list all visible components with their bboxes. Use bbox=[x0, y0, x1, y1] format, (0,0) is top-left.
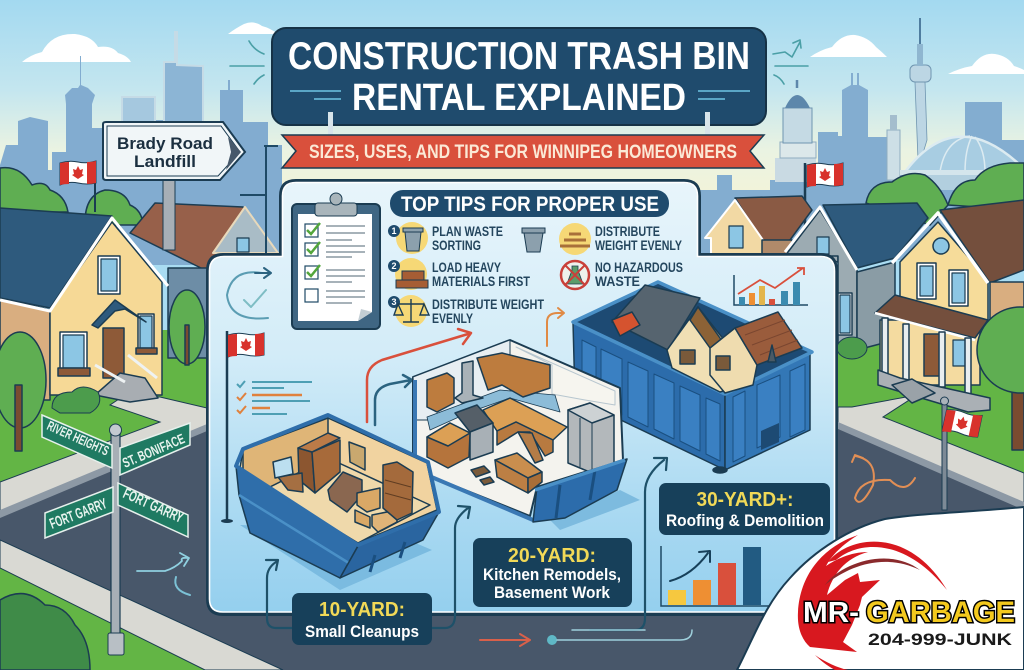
bush bottom left bbox=[0, 594, 90, 670]
title board bbox=[272, 28, 766, 136]
title board: RENTAL EXPLAINED bbox=[352, 77, 686, 119]
ribbon subtitle: SIZES, USES, AND TIPS FOR WINNIPEG HOMEOWNERS bbox=[309, 142, 737, 163]
logo lower swoosh bbox=[815, 655, 848, 670]
house: yellow right bbox=[875, 200, 1024, 412]
armchair bbox=[328, 472, 362, 512]
sidewalk left upper bbox=[0, 395, 207, 517]
picture bbox=[349, 442, 365, 470]
left face panels bbox=[582, 340, 720, 461]
range hood bbox=[455, 361, 483, 403]
right tree bbox=[977, 307, 1024, 450]
debris bbox=[471, 466, 494, 485]
interior walls bbox=[240, 418, 437, 543]
tip 1: plan waste sorting: PLAN WASTE bbox=[432, 224, 503, 239]
tip 3: distribute weight evenly: EVENLY bbox=[432, 311, 473, 326]
blue rim and body bbox=[415, 380, 533, 520]
house: gray right bbox=[785, 203, 928, 350]
left base cabinet bbox=[427, 423, 470, 468]
tip 1: plan waste sorting bbox=[388, 222, 503, 254]
arrow: orange bbox=[547, 308, 564, 346]
right face bbox=[725, 352, 810, 470]
10-yard label: Small Cleanups bbox=[305, 622, 419, 641]
arrow to 10-yard bbox=[266, 560, 293, 628]
kitchen walls bbox=[413, 340, 623, 516]
title board: CONSTRUCTION TRASH BIN bbox=[288, 35, 750, 78]
upper cabinets bbox=[477, 353, 550, 397]
street sign: river heights: RIVER HEIGHTS bbox=[45, 418, 111, 459]
background trees bbox=[0, 163, 1024, 225]
tip: distribute weight evenly right bbox=[559, 223, 682, 255]
skyline right bbox=[700, 18, 1024, 260]
30-yard label: 30-YARD+: bbox=[696, 489, 794, 511]
main panel bbox=[208, 181, 836, 614]
tip: distribute weight evenly right: DISTRIBUTE bbox=[595, 224, 660, 239]
front left tree bbox=[0, 332, 46, 451]
rim bbox=[236, 415, 439, 545]
logo red maple crescent bbox=[798, 535, 880, 652]
logo wordmark: MR- bbox=[803, 597, 859, 629]
title side accents bbox=[230, 40, 808, 84]
small tree bbox=[169, 290, 205, 365]
sky background bbox=[0, 0, 1024, 200]
brown roof bbox=[735, 312, 802, 365]
curb right bbox=[838, 422, 1024, 510]
street sign: fort garry right bbox=[118, 483, 188, 537]
tip: distribute weight evenly right: WEIGHT EVENLY bbox=[595, 238, 682, 253]
logo wordmark bbox=[803, 596, 1015, 629]
tips heading pill: TOP TIPS FOR PROPER USE bbox=[401, 193, 659, 216]
10-yard label bbox=[292, 593, 432, 645]
counter bbox=[483, 398, 567, 440]
street sign: fort garry right: FORT GARRY bbox=[120, 485, 186, 527]
tip 3: distribute weight evenly bbox=[388, 295, 545, 327]
30-yard label: Roofing & Demolition bbox=[666, 511, 824, 530]
panel flag and list bbox=[221, 331, 312, 523]
bar chart lower right bbox=[661, 546, 780, 606]
tip: no hazardous waste: NO HAZARDOUS bbox=[595, 260, 683, 275]
gray roof bbox=[612, 285, 700, 350]
ground: lawns bbox=[0, 330, 1024, 670]
tile wall bbox=[516, 347, 615, 405]
fridge bbox=[568, 403, 614, 473]
icon: trash can bbox=[522, 228, 545, 252]
arrow: teal rising bbox=[375, 375, 412, 425]
logo phone number: 204-999-JUNK bbox=[868, 630, 1013, 649]
street sign: fort garry left: FORT GARRY bbox=[47, 495, 109, 533]
brady road landfill sign bbox=[103, 122, 245, 180]
sidewalk left lower bbox=[0, 540, 283, 670]
shelf bbox=[383, 462, 413, 520]
left face bbox=[573, 322, 725, 470]
wardrobe bbox=[298, 448, 315, 493]
10-yard dumpster bbox=[236, 415, 439, 590]
curb left upper bbox=[0, 424, 207, 518]
tip 1: plan waste sorting: SORTING bbox=[432, 238, 481, 253]
20-yard label: Basement Work bbox=[494, 583, 610, 602]
stove bbox=[455, 405, 493, 432]
tip 2: load heavy materials first: 2 bbox=[391, 261, 397, 271]
street sign post bbox=[108, 424, 124, 655]
street sign: st boniface: ST. BONIFACE bbox=[120, 430, 187, 471]
brady road landfill sign: Landfill bbox=[134, 152, 196, 171]
logo dark swoosh bbox=[825, 559, 920, 585]
island bbox=[495, 453, 542, 478]
tip 1: plan waste sorting: 1 bbox=[391, 226, 397, 236]
clipboard icon bbox=[292, 193, 380, 329]
road bbox=[0, 425, 1024, 670]
tip 3: distribute weight evenly: 3 bbox=[391, 297, 397, 307]
arrow to 20-yard bbox=[432, 506, 470, 628]
base cabinets bbox=[497, 422, 553, 456]
mini chart upper right bbox=[734, 268, 808, 305]
20-yard label: 20-YARD: bbox=[508, 545, 596, 567]
ribbon subtitle bbox=[282, 135, 764, 168]
refresh check icon bbox=[227, 268, 271, 319]
broken house walls bbox=[667, 307, 745, 392]
house: brown roof back left bbox=[130, 203, 278, 358]
canadian flag left bbox=[60, 161, 96, 212]
front bush bbox=[52, 387, 100, 413]
arrow to 30-yard bbox=[590, 458, 667, 630]
street sign: fort garry left bbox=[45, 487, 113, 538]
leaning door bbox=[518, 432, 543, 463]
right flag bbox=[805, 163, 843, 226]
20-yard label bbox=[473, 538, 632, 607]
sidewalk right bbox=[838, 395, 1024, 507]
brady sign post bbox=[163, 178, 175, 250]
camera pole bbox=[240, 145, 278, 255]
logo red swoosh bbox=[828, 542, 947, 590]
tip: no hazardous waste bbox=[561, 260, 683, 289]
street sign: st boniface bbox=[120, 423, 190, 475]
street sign: river heights bbox=[42, 415, 112, 468]
right flag pole bbox=[940, 397, 982, 510]
house: yellow left bbox=[0, 208, 168, 402]
10-yard label: 10-YARD: bbox=[319, 599, 405, 621]
arrow: red rising bbox=[367, 329, 471, 422]
logo wordmark: GARBAGE bbox=[866, 596, 1015, 629]
brady road landfill sign: Brady Road bbox=[117, 134, 213, 153]
green bush right bbox=[837, 337, 867, 359]
tip: no hazardous waste: WASTE bbox=[595, 274, 640, 289]
skyline left bbox=[0, 32, 285, 265]
interior bbox=[573, 282, 812, 394]
house: back right cream bbox=[705, 196, 812, 256]
logo white area bbox=[737, 507, 1024, 670]
tip 2: load heavy materials first: LOAD HEAVY bbox=[432, 260, 501, 275]
logo bbox=[798, 535, 1015, 670]
boxes bbox=[357, 488, 380, 512]
20-yard dumpster with kitchen bbox=[413, 340, 640, 530]
road arrows bbox=[137, 455, 915, 646]
tip 3: distribute weight evenly: DISTRIBUTE WEIGHT bbox=[432, 297, 545, 312]
30-yard label bbox=[659, 483, 830, 535]
tip 2: load heavy materials first bbox=[388, 258, 531, 290]
clouds bbox=[22, 22, 1024, 74]
30-yard dumpster bbox=[573, 282, 812, 473]
dresser and monitor bbox=[278, 473, 303, 492]
tip 2: load heavy materials first: MATERIALS FIRST bbox=[432, 274, 531, 289]
20-yard label: Kitchen Remodels, bbox=[483, 565, 621, 584]
